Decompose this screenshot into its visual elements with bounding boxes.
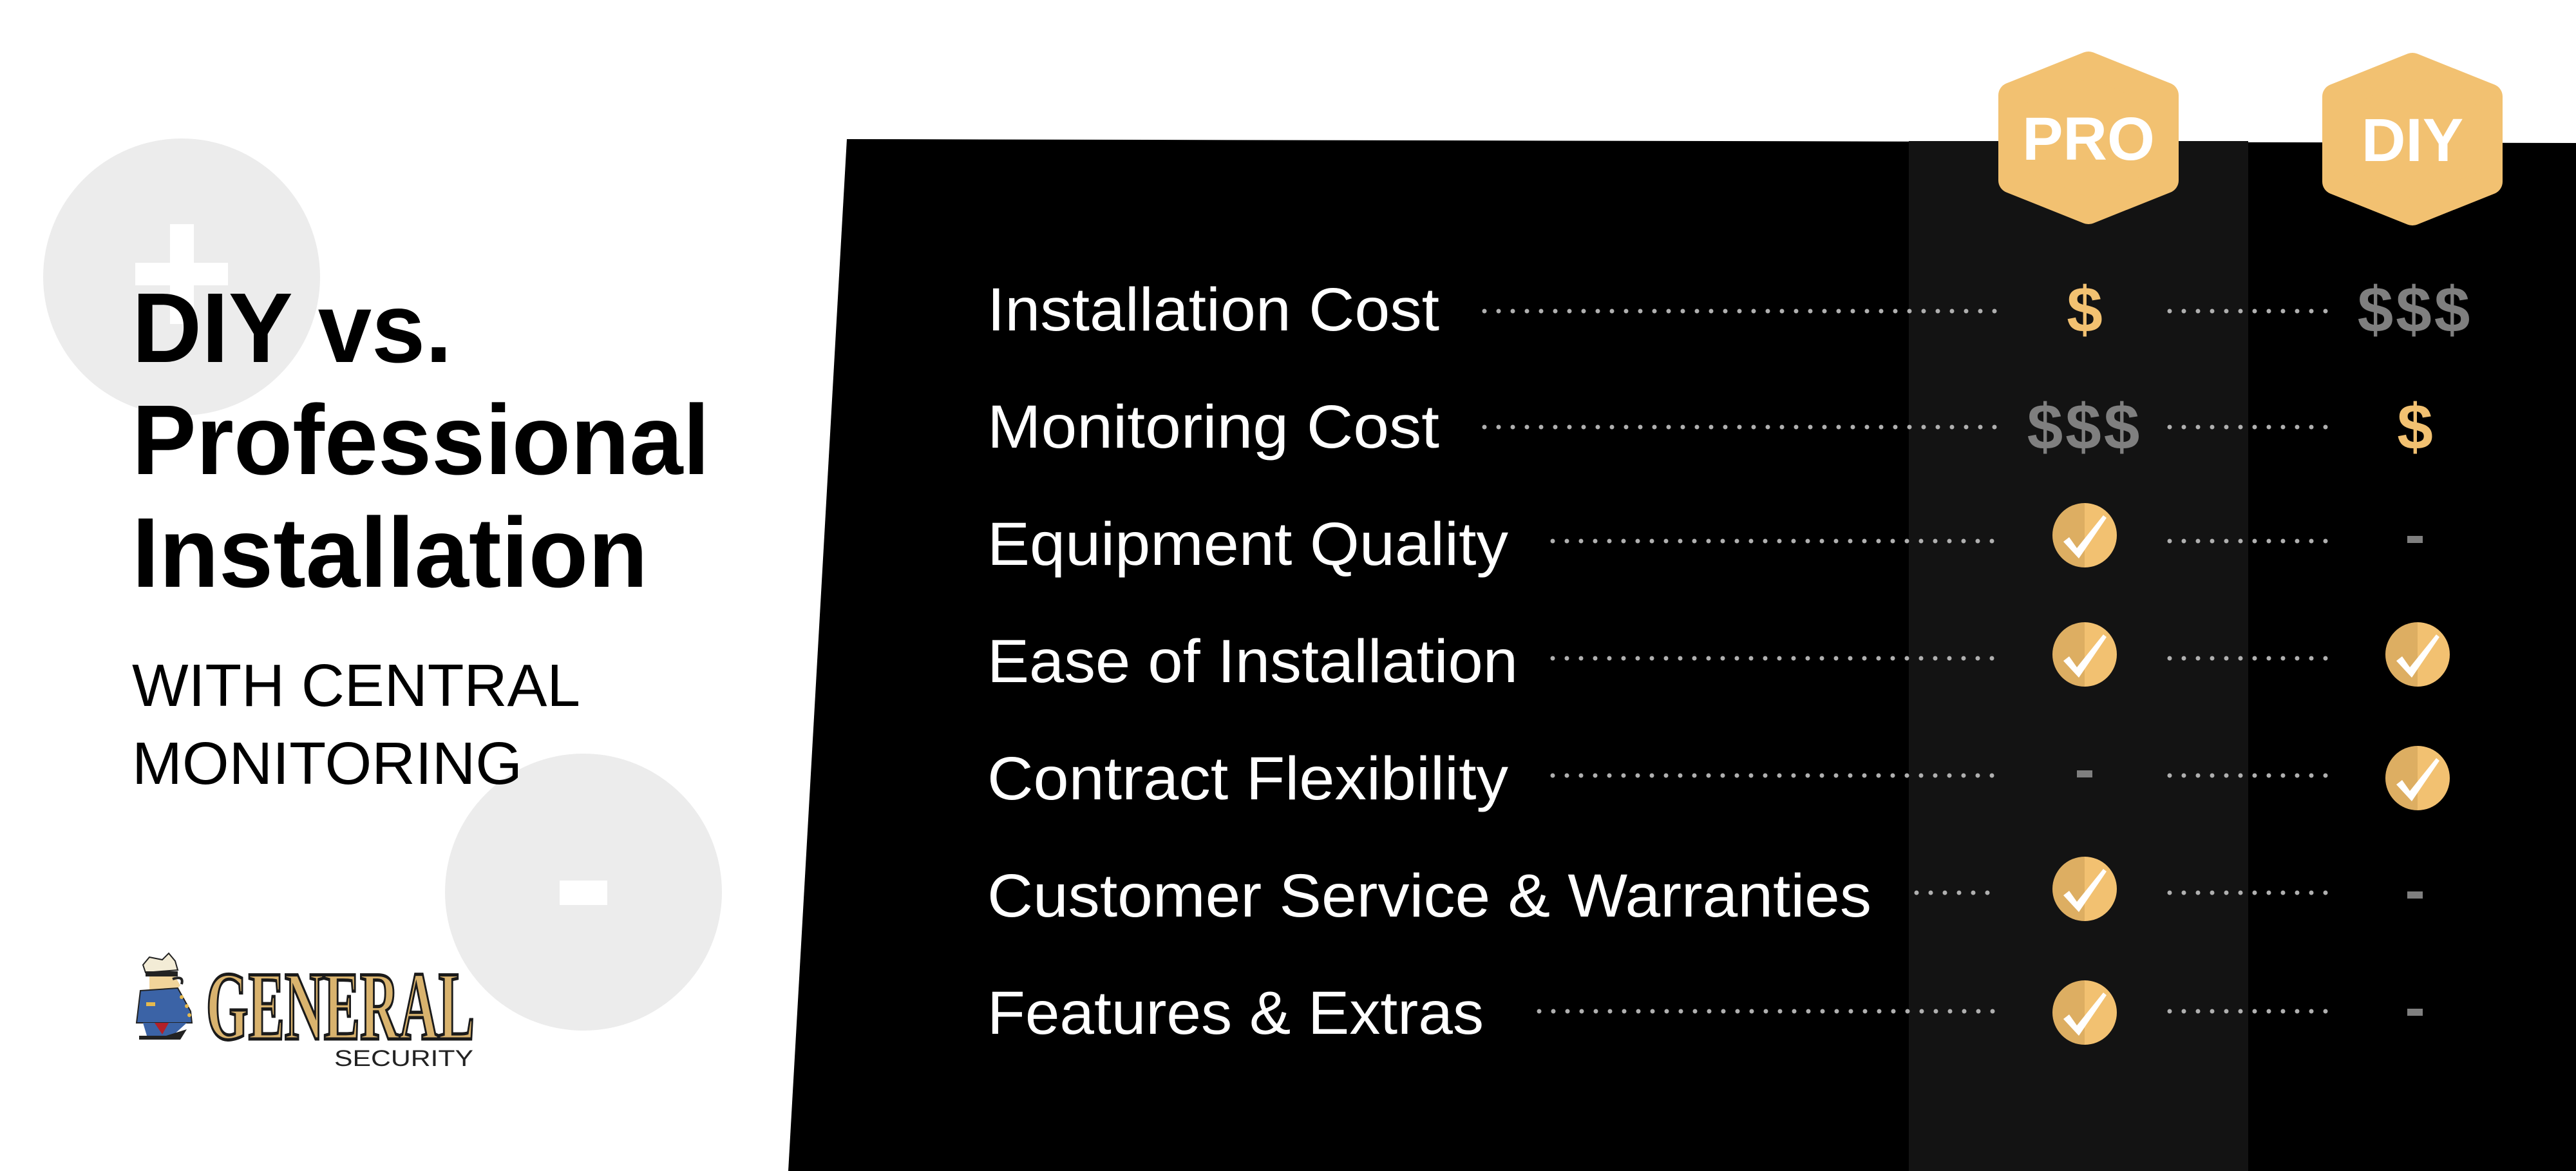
badge: PRO: PRO — [2022, 105, 2155, 173]
row: Monitoring Cost: $$$ — [2027, 391, 2142, 463]
row: Monitoring Cost: Monitoring Cost — [987, 393, 1439, 461]
row: Contract Flexibility — [987, 745, 2450, 813]
title — [132, 272, 710, 608]
row: Installation Cost — [987, 274, 2472, 346]
row: Features & Extras: Features & Extras — [987, 979, 1484, 1047]
title: DIY vs. — [132, 272, 452, 383]
title: Professional — [132, 385, 710, 495]
row: Features & Extras — [987, 979, 2423, 1047]
badge: PRO — [2011, 64, 2166, 211]
badge: DIY — [2335, 66, 2490, 213]
row: Installation Cost: $ — [2067, 274, 2103, 346]
decorative circle: plus — [43, 138, 320, 415]
decorative circle: minus — [445, 754, 722, 1031]
row: Ease of Installation: Ease of Installation — [987, 627, 1518, 696]
subtitle: WITH CENTRAL — [132, 652, 580, 719]
row: Customer Service & Warranties — [987, 857, 2423, 930]
row: Ease of Installation — [987, 622, 2450, 696]
subtitle: MONITORING — [132, 730, 522, 797]
row: Installation Cost: Installation Cost — [987, 276, 1439, 344]
pro column highlight — [1909, 141, 2248, 1171]
panel: comparison table — [788, 64, 2576, 1171]
row: Equipment Quality: Equipment Quality — [987, 510, 1509, 578]
logo: General Security — [137, 952, 475, 1071]
title: Installation — [132, 497, 648, 608]
subtitle — [132, 652, 580, 797]
logo text: GENERAL: GENERAL — [206, 952, 475, 1060]
row: Monitoring Cost — [987, 391, 2433, 463]
badge: DIY: DIY — [2362, 106, 2463, 175]
row: Customer Service & Warranties: Customer Service & Warranties — [987, 862, 1871, 930]
row: Monitoring Cost: $ — [2397, 391, 2433, 463]
logo text: SECURITY: SECURITY — [334, 1046, 473, 1071]
row: Contract Flexibility: Contract Flexibility — [987, 745, 1509, 813]
row: Equipment Quality — [987, 503, 2423, 578]
row: Installation Cost: $$$ — [2358, 274, 2472, 346]
icon: general mascot — [137, 953, 192, 1040]
